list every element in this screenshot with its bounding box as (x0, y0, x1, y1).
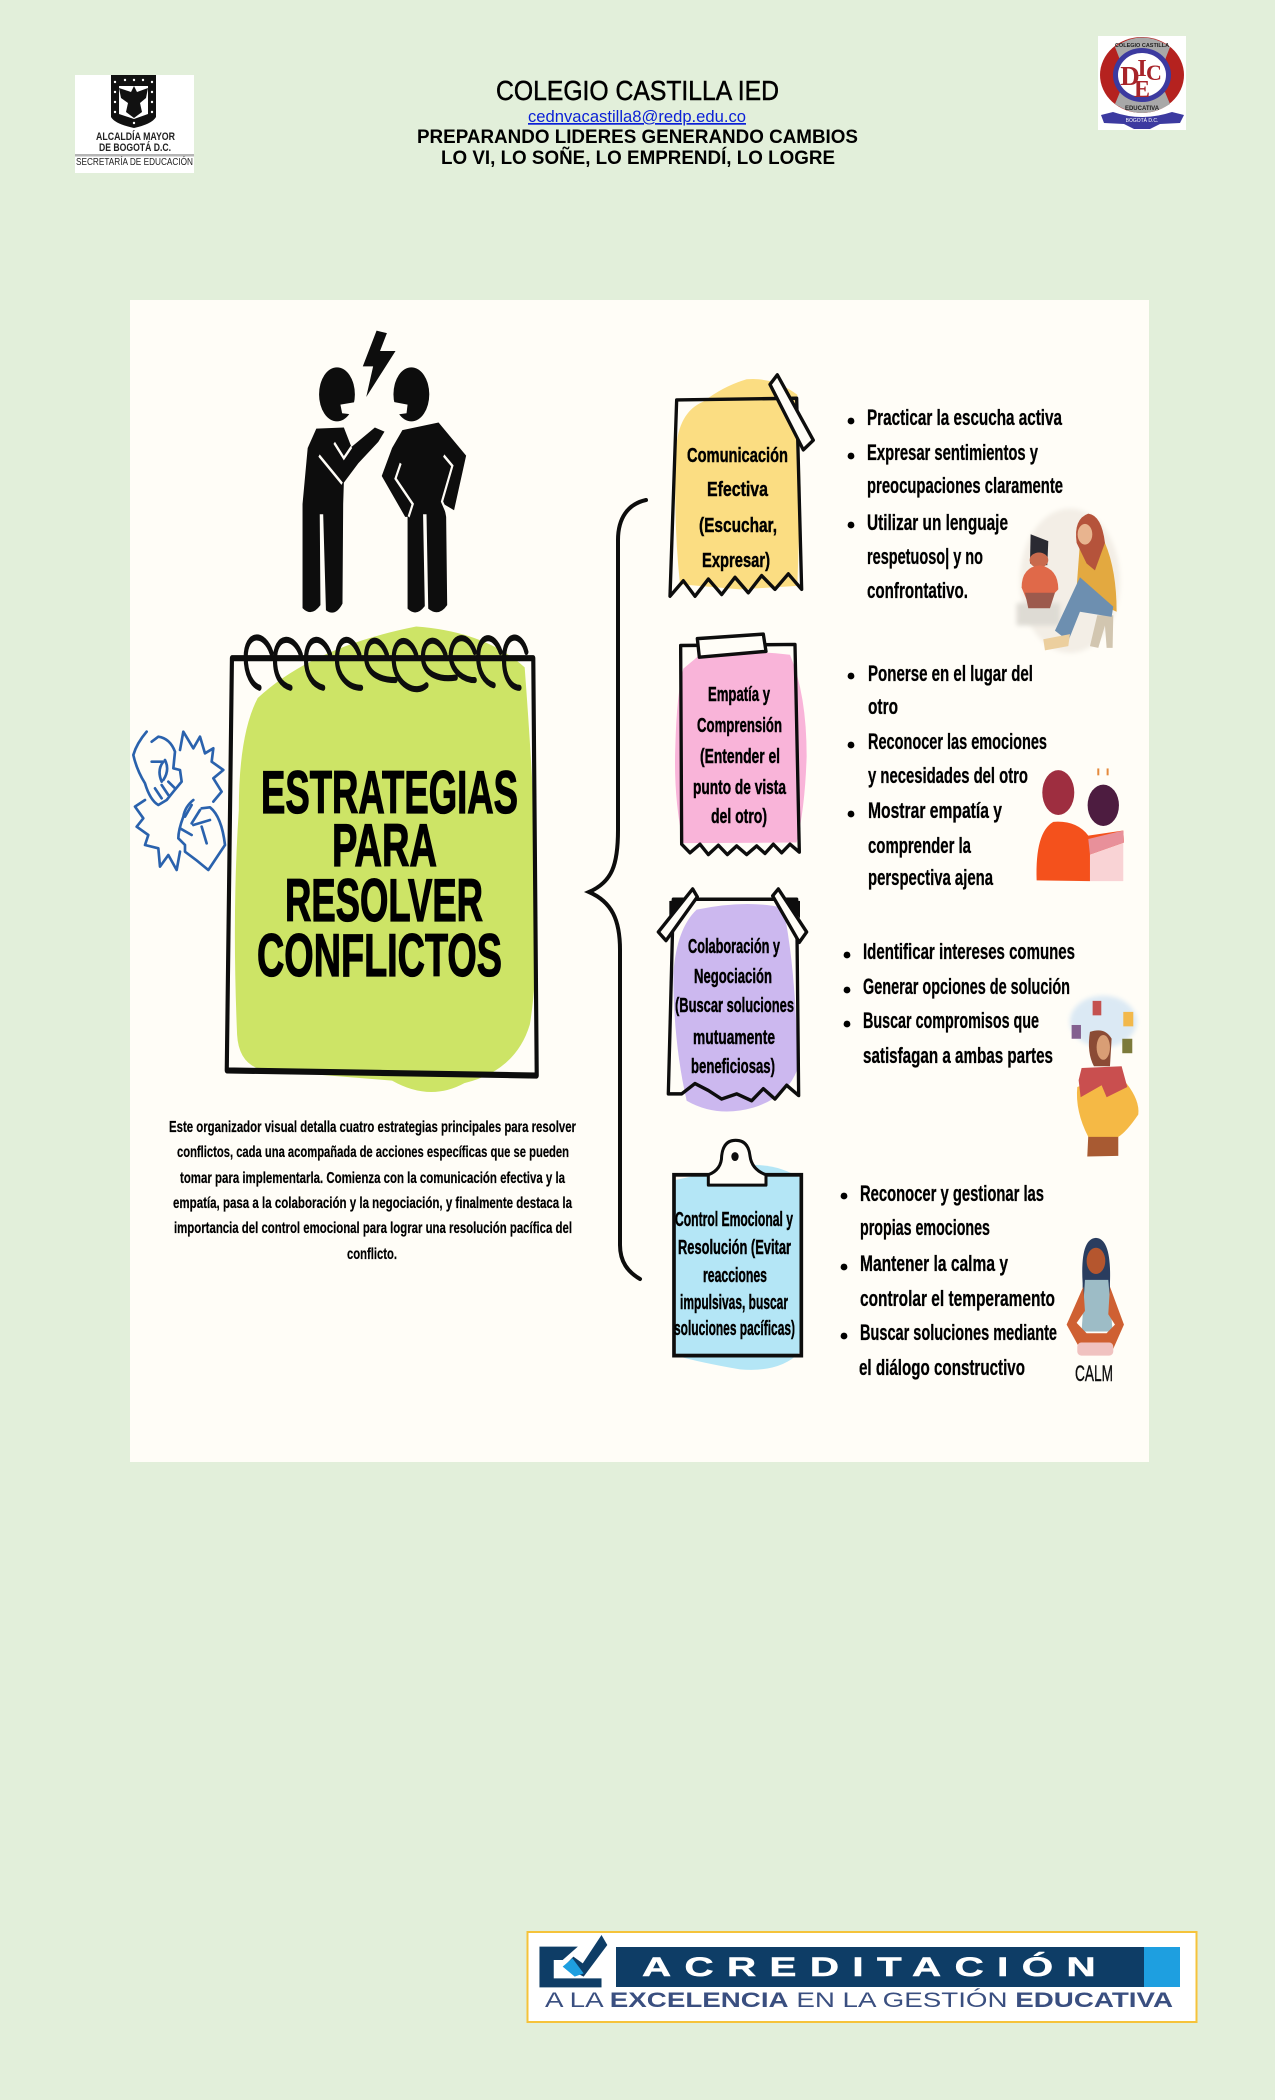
logo: school crest: C (1146, 60, 1162, 85)
card text: Expresar) (702, 550, 770, 572)
motto line one: PREPARANDO LIDERES GENERANDO CAMBIOS (417, 127, 858, 148)
card text: (Buscar soluciones (675, 995, 794, 1017)
list: comunicación efectiva actions (848, 405, 1063, 603)
list: control emocional actions: Buscar soluciones mediante (860, 1320, 1057, 1345)
description paragraph: importancia del control emocional para lograr una resolución pacífica del (174, 1220, 572, 1237)
list: comunicación efectiva actions: respetuoso| y no (867, 544, 983, 569)
card text: beneficiosas) (691, 1056, 775, 1078)
logo: school crest: D (1120, 61, 1140, 91)
card text: Comprensión (697, 715, 782, 737)
card: control emocional (674, 1140, 802, 1370)
card text: Resolución (Evitar (678, 1237, 791, 1259)
card text: Comunicación (687, 445, 788, 467)
card text: punto de vista (693, 777, 787, 799)
card text: impulsivas, buscar (680, 1292, 788, 1314)
badge: acreditación (528, 1932, 1196, 2022)
header (75, 36, 1186, 173)
list: empatía actions: Mostrar empatía y (868, 798, 1003, 823)
logo: school crest: BOGOTÁ D.C. (1126, 117, 1158, 124)
list: colaboración actions: Generar opciones de solución (863, 974, 1070, 999)
card text: mutuamente (693, 1027, 775, 1049)
notebook drawing (227, 627, 537, 1092)
icon: blue fists (133, 732, 225, 870)
illustration: woman and child talking (1017, 508, 1120, 653)
illustration: person meditating, calm (1067, 1238, 1124, 1386)
logo: school crest (1098, 36, 1186, 130)
card text: soluciones pacíficas) (674, 1318, 795, 1340)
list: comunicación efectiva actions: confrontativo. (867, 578, 968, 603)
illustration: person thinking with ideas (1070, 996, 1138, 1157)
card text: Control Emocional y (675, 1209, 794, 1231)
motto line two: LO VI, LO SOÑE, LO EMPRENDÍ, LO LOGRE (441, 147, 835, 169)
card: comunicación efectiva (670, 375, 813, 596)
list: control emocional actions: Reconocer y gestionar las (860, 1181, 1044, 1206)
calm label: CALM (1075, 1361, 1113, 1386)
main title: RESOLVER (285, 867, 483, 934)
description paragraph: tomar para implementarla. Comienza con la comunicación efectiva y la (180, 1170, 565, 1187)
card text: Colaboración y (688, 936, 781, 958)
school name: COLEGIO CASTILLA IED (496, 75, 779, 106)
list: comunicación efectiva actions: preocupaciones claramente (867, 473, 1063, 498)
logo: Alcaldía Mayor de Bogotá: SECRETARÍA DE EDUCACIÓN (76, 155, 193, 168)
card text: (Escuchar, (699, 515, 777, 537)
card: colaboración y negociación (658, 889, 807, 1112)
card text: Empatía y (708, 684, 771, 706)
list: control emocional actions: controlar el temperamento (860, 1286, 1055, 1311)
list: empatía actions (848, 661, 1047, 890)
list: colaboración actions (844, 939, 1075, 1068)
notebook: main title card (227, 627, 537, 1092)
list: empatía actions: Reconocer las emociones (868, 729, 1047, 754)
main title: CONFLICTOS (257, 922, 502, 989)
logo: Alcaldía Mayor de Bogotá: ALCALDÍA MAYOR (96, 130, 175, 143)
list: control emocional actions: Mantener la calma y (860, 1251, 1009, 1276)
curly brace connector (589, 500, 646, 1279)
accreditation subtitle: A LA EXCELENCIA EN LA GESTIÓN EDUCATIVA (545, 1989, 1173, 2012)
logo: school crest: I (1137, 56, 1147, 82)
card drawing (670, 375, 813, 596)
card text: reacciones (703, 1265, 767, 1287)
card drawing (658, 889, 807, 1112)
card text: Efectiva (707, 479, 769, 501)
main title: ESTRATEGIAS (261, 759, 518, 826)
list: control emocional actions: propias emociones (860, 1215, 990, 1240)
list: control emocional actions (841, 1181, 1057, 1380)
main title: PARA (332, 812, 437, 879)
icon: check mark (539, 1935, 607, 1987)
list: comunicación efectiva actions: Utilizar un lenguaje (867, 510, 1008, 535)
card text: (Entender el (700, 746, 780, 768)
main title (257, 759, 518, 989)
accreditation bar (616, 1947, 1144, 1987)
school email: cednvacastilla8@redp.edu.co (528, 107, 746, 126)
illustration: two friends embracing (1036, 768, 1124, 881)
list: colaboración actions: Buscar compromisos que (863, 1008, 1039, 1033)
card text (675, 936, 794, 1078)
description paragraph: empatía, pasa a la colaboración y la negociación, y finalmente destaca la (173, 1195, 572, 1212)
list: empatía actions: Ponerse en el lugar del (868, 661, 1033, 686)
card text (674, 1209, 795, 1340)
icon: two people arguing (303, 331, 466, 613)
list: control emocional actions: el diálogo constructivo (859, 1355, 1025, 1380)
list: empatía actions: perspectiva ajena (868, 865, 994, 890)
logo: Alcaldía Mayor de Bogotá: DE BOGOTÁ D.C. (99, 141, 171, 154)
card drawing (674, 1140, 802, 1370)
logo: school crest: COLEGIO CASTILLA (1115, 43, 1169, 49)
list: colaboración actions: satisfagan a ambas partes (863, 1043, 1053, 1068)
card text (687, 445, 788, 572)
list: comunicación efectiva actions: Practicar la escucha activa (867, 405, 1063, 430)
logo: school crest: EDUCATIVA (1125, 106, 1160, 112)
card drawing (675, 634, 807, 855)
description paragraph: conflicto. (347, 1246, 397, 1263)
list: empatía actions: otro (868, 694, 898, 719)
list: comunicación efectiva actions: Expresar sentimientos y (867, 440, 1039, 465)
logo: Alcaldía Mayor de Bogotá (75, 75, 194, 173)
card text (693, 684, 787, 828)
logo: school crest: E (1134, 77, 1150, 103)
list: empatía actions: y necesidades del otro (868, 763, 1028, 788)
card text: del otro) (711, 806, 767, 828)
list: colaboración actions: Identificar intereses comunes (863, 939, 1075, 964)
card: empatía y comprensión (675, 634, 807, 855)
panel: infographic (130, 300, 1149, 1462)
list: empatía actions: comprender la (868, 833, 972, 858)
description paragraph (169, 1119, 576, 1263)
description paragraph: conflictos, cada una acompañada de acciones específicas que se pueden (177, 1144, 569, 1161)
card text: Negociación (694, 966, 772, 988)
accreditation title: ACREDITACIÓN (642, 1951, 1109, 1982)
description paragraph: Este organizador visual detalla cuatro estrategias principales para resolver (169, 1119, 576, 1136)
